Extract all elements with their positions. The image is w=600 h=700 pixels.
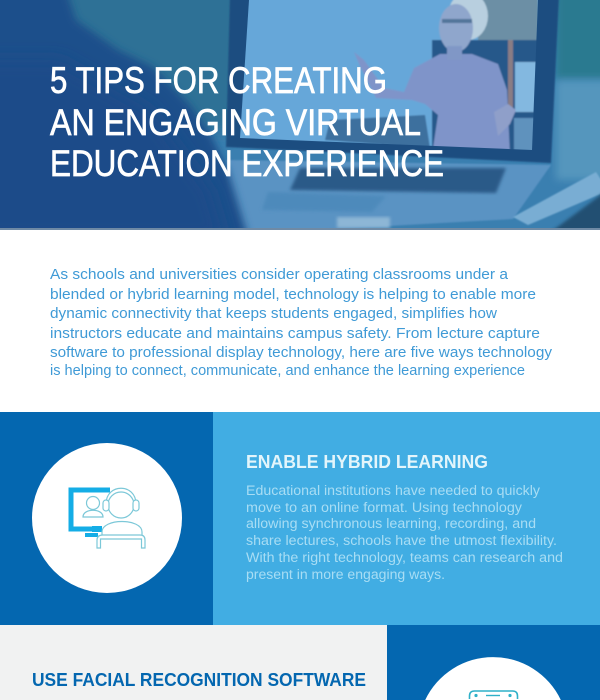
panel: enable hybrid learning [0,412,600,625]
body text: With the right technology, teams can research and [246,550,563,565]
title [50,60,444,184]
body text: Educational institutions have needed to quickly [246,483,540,498]
intro paragraph: instructors educate and maintains campus safety. From lecture capture [50,325,540,342]
icon circle [425,657,561,700]
intro paragraph: dynamic connectivity that keeps students engaged, simplifies how [50,305,497,322]
panel background: dark blue icon side [387,625,600,700]
intro paragraph: As schools and universities consider operating classrooms under a [50,266,509,283]
teacher [354,52,510,155]
body text: move to an online format. Using technology [246,500,522,515]
panel background: light blue text side [213,412,600,625]
intro paragraph [50,266,552,379]
intro paragraph: software to professional display technology, here are five ways technology [50,344,552,361]
heading: ENABLE HYBRID LEARNING [246,452,488,472]
heading: USE FACIAL RECOGNITION SOFTWARE [32,670,366,690]
body text [246,483,563,582]
notebook at lower right [513,172,600,225]
hero photo: laptop showing teacher with blue overlay [0,0,600,240]
laptop lid [226,0,559,163]
intro paragraph: blended or hybrid learning model, technology is helping to enable more [50,286,536,303]
body text: present in more engaging ways. [246,567,445,582]
panel background: dark blue icon side [0,412,213,625]
icon: facial recognition device [470,691,518,699]
body text: allowing synchronous learning, recording, and [246,516,536,531]
body text: share lectures, schools have the utmost flexibility. [246,533,557,548]
intro paragraph: is helping to connect, communicate, and enhance the learning experience [50,362,525,379]
title: EDUCATION EXPERIENCE [50,143,444,184]
laptop base [225,160,551,235]
foreground student silhouette [0,0,249,240]
hero banner [0,0,600,240]
icon circle [32,443,182,593]
icon: student at monitor with headset [71,488,145,548]
panel background: light grey text side [0,625,387,700]
title: 5 TIPS FOR CREATING [50,60,387,101]
panel: use facial recognition software [0,625,600,700]
title: AN ENGAGING VIRTUAL [50,102,421,143]
